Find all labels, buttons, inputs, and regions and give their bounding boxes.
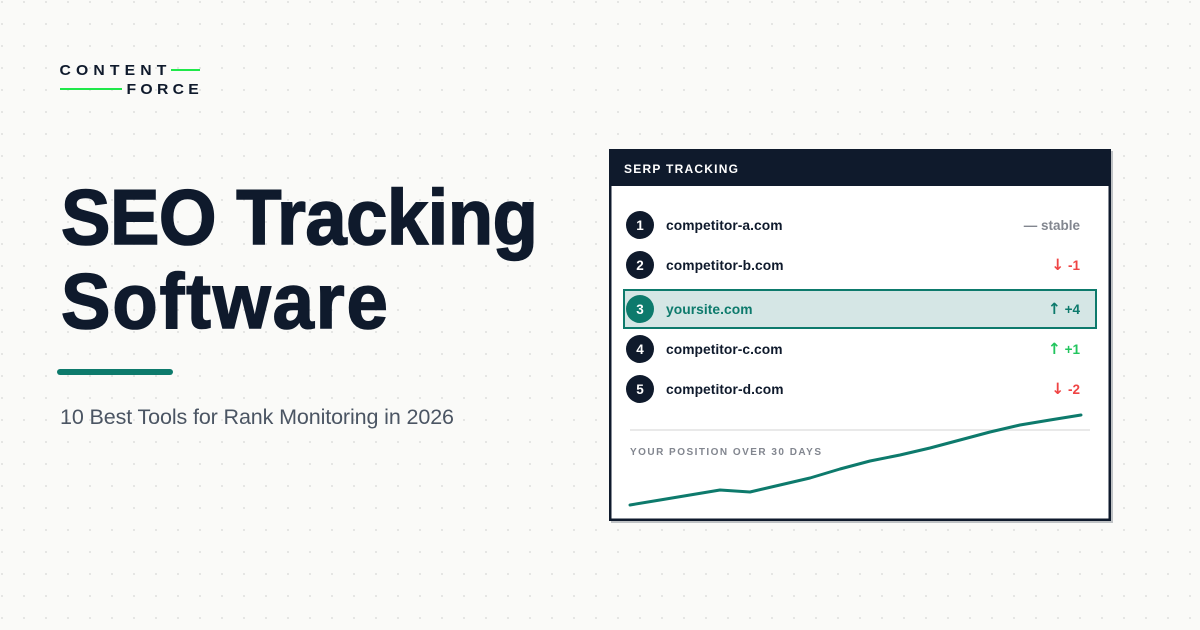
row 5: 5	[636, 382, 644, 397]
row 2	[626, 251, 1080, 279]
logo: Content Force: FORCE	[126, 81, 203, 98]
logo: Content Force	[60, 62, 203, 98]
title: SEO Tracking	[61, 174, 538, 261]
row 1	[626, 211, 1080, 239]
row 5: competitor-d.com	[666, 382, 784, 397]
title: Software	[61, 258, 388, 345]
row 1: 1	[636, 218, 644, 233]
logo: Content Force: CONTENT	[60, 62, 172, 79]
title	[61, 174, 538, 345]
row 3: highlighted yoursite.com: 3	[636, 302, 644, 317]
card header	[609, 149, 1111, 186]
row 1: — stable	[1024, 218, 1080, 233]
card body	[610, 150, 1110, 520]
chart label: YOUR POSITION OVER 30 DAYS	[630, 447, 821, 458]
line chart: position over 30 days	[630, 415, 1081, 505]
row 4: competitor-c.com	[666, 342, 782, 357]
row 1: competitor-a.com	[666, 218, 782, 233]
card header: SERP TRACKING	[624, 162, 738, 176]
row 2: competitor-b.com	[666, 258, 784, 273]
panel: SERP tracking card	[609, 149, 1113, 523]
row 5: ↓ -2	[1051, 380, 1080, 398]
row 3: highlighted yoursite.com: ↑ +4	[1048, 300, 1080, 318]
row 4: ↑ +1	[1048, 340, 1080, 358]
row 4	[626, 335, 1080, 363]
subtitle: 10 Best Tools for Rank Monitoring in 2026	[60, 405, 454, 429]
card shadow	[611, 151, 1113, 523]
row 3: highlighted yoursite.com: yoursite.com	[666, 302, 752, 317]
row 2: ↓ -1	[1051, 256, 1080, 274]
row 4: 4	[636, 342, 644, 357]
row 3: highlighted yoursite.com	[624, 290, 1096, 328]
accent bar	[57, 369, 173, 375]
row 5	[626, 375, 1080, 403]
row 2: 2	[636, 258, 644, 273]
